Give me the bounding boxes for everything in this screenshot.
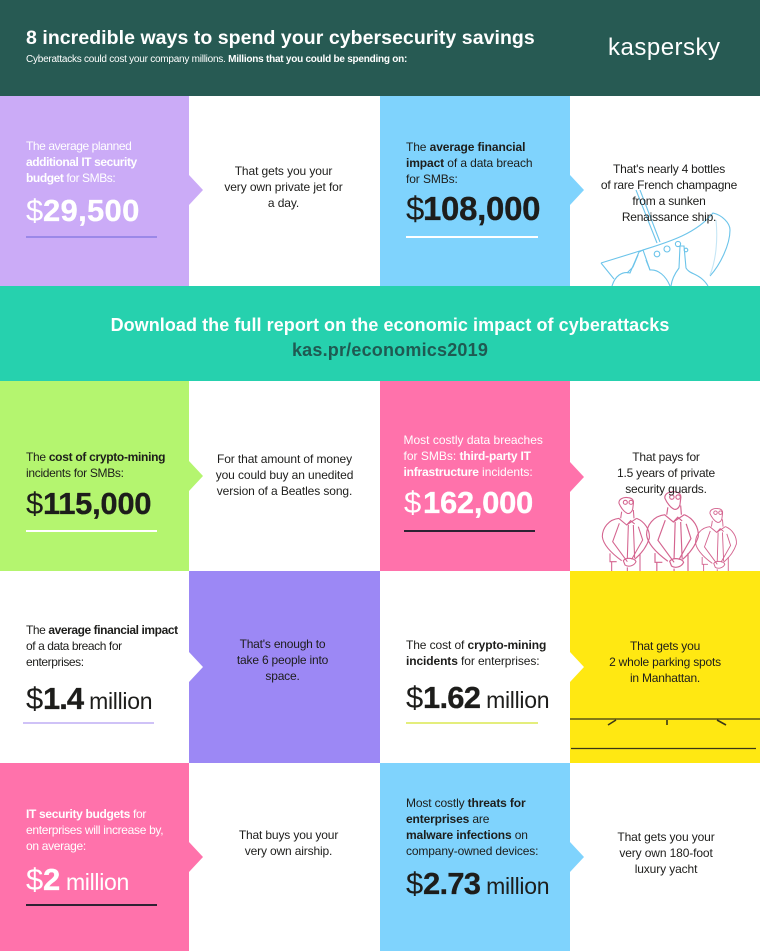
- rule: [26, 530, 157, 532]
- stat description: incidents for SMBs:: [26, 466, 124, 480]
- header band: [0, 0, 760, 96]
- panel: enterprise breach impact: [23, 623, 178, 724]
- stat value: 29,500: [43, 193, 140, 228]
- panel: Beatles song: version of a Beatles song.: [217, 484, 352, 498]
- panel: enterprise budgets: [0, 763, 189, 951]
- stat description: incidents for enterprises:: [406, 654, 539, 668]
- stat description: impact of a data breach: [406, 156, 532, 170]
- stat description: The average planned: [26, 139, 131, 153]
- stat value: 162,000: [423, 485, 533, 520]
- stat value: 2 million: [43, 862, 129, 897]
- illustration: security guards: [602, 491, 737, 571]
- caption: take 6 people into: [237, 653, 328, 667]
- stat description: infrastructure incidents:: [404, 465, 533, 479]
- panel: space trip: [189, 571, 380, 763]
- stat description: IT security budgets for: [26, 807, 146, 821]
- stat description: [26, 807, 163, 853]
- stat value: 1.62 million: [423, 680, 549, 715]
- panel: private guards: That pays for: [632, 450, 700, 464]
- rule: [26, 236, 157, 238]
- stat description: [26, 139, 137, 185]
- caption: That's enough to: [240, 637, 325, 651]
- panel: champagne: of rare French champagne: [601, 178, 737, 192]
- stat description: enterprises will increase by,: [26, 823, 163, 837]
- stat value: 2.73 million: [423, 866, 549, 901]
- illustration: sunken ship and bottles: [600, 190, 731, 286]
- panel: yacht: That gets you your: [617, 830, 715, 844]
- stat description: [406, 796, 538, 858]
- arrow: notch white: [189, 652, 203, 682]
- panel: Beatles song: For that amount of money: [217, 452, 352, 466]
- panel: enterprise crypto-mining: [406, 638, 549, 724]
- panel: Beatles song: [216, 452, 353, 498]
- kaspersky logo: kaspersky: [608, 34, 721, 61]
- caption: 2 whole parking spots: [609, 655, 721, 669]
- rule: [406, 722, 538, 724]
- stat value: 1.4 million: [43, 681, 152, 716]
- stat description: Most costly threats for: [406, 796, 525, 810]
- panel: yacht: [617, 830, 715, 876]
- rule: [26, 904, 157, 906]
- panel: private guards: security guards.: [625, 482, 707, 496]
- panel: champagne: from a sunken: [632, 194, 706, 208]
- stat description: company-owned devices:: [406, 844, 538, 858]
- stat value: $: [406, 190, 424, 227]
- arrow: notch white 2: [570, 652, 584, 682]
- stat value: $: [404, 485, 421, 520]
- arrow: purple: [189, 175, 203, 205]
- stat value: 108,000: [423, 190, 540, 227]
- stat value: $: [406, 680, 422, 715]
- stat value: $: [26, 486, 43, 521]
- banner text: Download the full report on the economic impact of cyberattacks: [111, 315, 669, 335]
- stat description: [404, 433, 543, 479]
- stat value: 115,000: [43, 486, 151, 521]
- arrow: pink: [570, 462, 584, 492]
- stat description: enterprises:: [26, 655, 84, 669]
- caption: That gets you: [630, 639, 700, 653]
- rule: [23, 722, 154, 724]
- stat description: malware infections on: [406, 828, 528, 842]
- stat description: enterprises are: [406, 812, 489, 826]
- panel: champagne: [601, 162, 737, 224]
- stat value: $: [26, 862, 43, 897]
- panel: third-party incidents: [380, 381, 570, 571]
- panel: private jet: [224, 164, 343, 210]
- stat description: The cost of crypto-mining: [406, 638, 546, 652]
- panel: malware infections: [380, 763, 570, 951]
- caption: space.: [265, 669, 300, 683]
- stat value: $: [406, 866, 422, 901]
- caption: [609, 639, 721, 685]
- stat description: The average financial: [406, 140, 525, 154]
- title: 8 incredible ways to spend your cybersecurity savings: [26, 27, 535, 49]
- panel: yacht: very own 180-foot: [619, 846, 713, 860]
- panel: champagne: Renaissance ship.: [622, 210, 716, 224]
- rule: [404, 530, 535, 532]
- panel: private jet: That gets you your: [235, 164, 332, 178]
- illustration: parking lines: [570, 718, 760, 750]
- panel: airship: very own airship.: [245, 844, 332, 858]
- stat description: [26, 623, 178, 669]
- banner text: [111, 315, 669, 360]
- subtitle: Cyberattacks could cost your company millions. Millions that you could be spending on:: [26, 54, 407, 65]
- panel: SMB security budget: [0, 96, 189, 286]
- panel: private guards: 1.5 years of private: [617, 466, 715, 480]
- arrow: pink 2: [189, 842, 203, 872]
- arrow: blue: [570, 175, 584, 205]
- banner: download: [0, 286, 760, 381]
- panel: parking spots: [570, 571, 760, 763]
- panel: SMB crypto-mining: [0, 381, 189, 571]
- panel: private jet: a day.: [268, 196, 299, 210]
- rule: [406, 236, 538, 238]
- stat description: budget for SMBs:: [26, 171, 115, 185]
- arrow: green: [189, 461, 203, 491]
- stat value: $: [26, 681, 42, 716]
- panel: airship: [239, 828, 338, 858]
- panel: airship: That buys you your: [239, 828, 338, 842]
- panel: Beatles song: you could buy an unedited: [216, 468, 353, 482]
- panel: private guards: [617, 450, 715, 496]
- caption: in Manhattan.: [630, 671, 700, 685]
- stat description: Most costly data breaches: [404, 433, 543, 447]
- stat description: [406, 140, 532, 186]
- panel: yacht: luxury yacht: [635, 862, 697, 876]
- stat description: of a data breach for: [26, 639, 122, 653]
- arrow: blue 2: [570, 842, 584, 872]
- stat description: for SMBs:: [406, 172, 458, 186]
- panel: private jet: very own private jet for: [224, 180, 343, 194]
- stat value: $: [26, 193, 44, 228]
- stat description: for SMBs: third-party IT: [404, 449, 531, 463]
- stat description: on average:: [26, 839, 86, 853]
- panel: SMB data breach impact: [380, 96, 570, 286]
- stat description: additional IT security: [26, 155, 137, 169]
- panel: champagne: That's nearly 4 bottles: [613, 162, 725, 176]
- stat description: The average financial impact: [26, 623, 178, 637]
- stat description: The cost of crypto-mining: [26, 450, 165, 464]
- banner text: kas.pr/economics2019: [292, 340, 488, 360]
- stat description: [406, 638, 546, 668]
- caption: [237, 637, 328, 683]
- stat description: [26, 450, 165, 480]
